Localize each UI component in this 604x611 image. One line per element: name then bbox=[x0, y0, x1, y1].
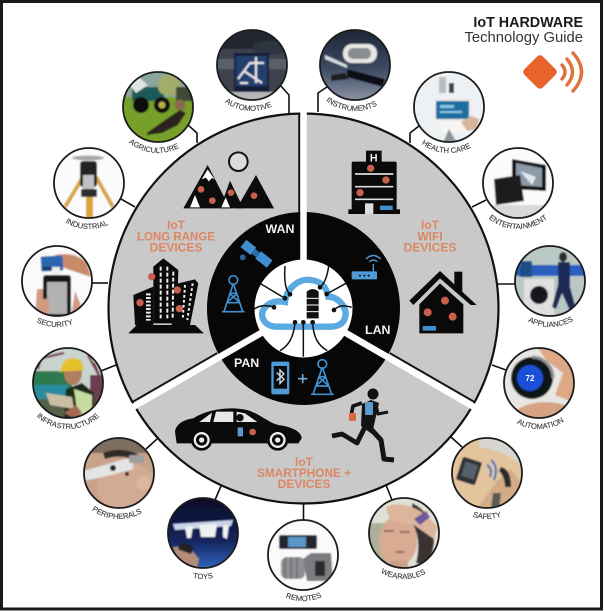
label: automotive: AUTOMOTIVE bbox=[224, 98, 272, 111]
heading: smartphone devices: DEVICES bbox=[278, 477, 330, 491]
station: automation bbox=[492, 347, 575, 429]
photo: agriculture bbox=[122, 71, 194, 143]
title: IoT HARDWARE bbox=[473, 15, 583, 31]
station: peripherals bbox=[83, 437, 158, 519]
icon: runner bbox=[332, 388, 394, 460]
icon: wifi router bbox=[352, 255, 381, 279]
photo: peripherals bbox=[83, 437, 157, 511]
label: WAN: WAN bbox=[266, 222, 294, 236]
heading: smartphone devices: SMARTPHONE + bbox=[257, 466, 351, 480]
station: toys bbox=[167, 486, 239, 580]
station: safety bbox=[450, 436, 523, 519]
label: wearables: WEARABLES bbox=[382, 568, 426, 579]
icon: plus bbox=[298, 374, 307, 383]
panel: outer grey disc bbox=[108, 114, 498, 504]
heading: wifi devices: WIFI bbox=[417, 230, 443, 244]
icon: car bbox=[175, 408, 302, 451]
label: peripherals: PERIPHERALS bbox=[92, 506, 142, 519]
heading: smartphone devices bbox=[257, 455, 351, 491]
label: agriculture: AGRICULTURE bbox=[128, 140, 180, 154]
divider strips between sectors bbox=[127, 105, 480, 410]
label: automation: AUTOMATION bbox=[516, 417, 564, 429]
icon: mountains bbox=[183, 152, 274, 208]
heading: wifi devices bbox=[404, 218, 456, 254]
heading: wifi devices: IoT bbox=[421, 218, 440, 232]
label: toys: TOYS bbox=[194, 572, 213, 580]
title: Technology Guide bbox=[465, 30, 583, 46]
label: PAN: PAN bbox=[234, 356, 259, 370]
icon: orange signal logo bbox=[522, 53, 582, 91]
photo: remotes bbox=[267, 519, 339, 591]
station: agriculture bbox=[122, 71, 198, 154]
heading: long range devices: LONG RANGE bbox=[137, 230, 215, 244]
title bbox=[465, 15, 583, 46]
label: entertainment: ENTERTAINMENT bbox=[489, 214, 546, 229]
label: safety: SAFETY bbox=[473, 512, 500, 519]
label: industrial: INDUSTRIAL bbox=[66, 218, 108, 229]
photo: automotive bbox=[216, 29, 288, 102]
icon: tower left bbox=[222, 276, 245, 312]
station: health care bbox=[409, 71, 485, 154]
station: remotes bbox=[267, 504, 339, 602]
heading: long range devices bbox=[137, 218, 215, 254]
station: wearables bbox=[368, 486, 440, 579]
icon: hospital bbox=[348, 151, 400, 214]
panel: white centre bbox=[254, 260, 352, 358]
photo: health care bbox=[413, 71, 485, 143]
photo: appliances bbox=[514, 245, 586, 317]
station: instruments bbox=[317, 29, 391, 112]
heading: long range devices: DEVICES bbox=[150, 240, 202, 254]
icon: city buildings bbox=[128, 258, 204, 333]
station: automotive bbox=[216, 29, 290, 113]
diagram: central wheel bbox=[108, 105, 498, 504]
station: infrastructure bbox=[32, 347, 116, 429]
icon: hospital: H bbox=[370, 153, 378, 165]
station: security bbox=[21, 245, 108, 328]
photo: instruments bbox=[319, 29, 391, 101]
photo: wearables bbox=[368, 497, 440, 571]
heading: long range devices: IoT bbox=[167, 218, 186, 232]
icon: cloud with server bbox=[254, 266, 352, 357]
icon: bluetooth phone bbox=[271, 362, 289, 394]
photo: entertainment bbox=[482, 147, 554, 219]
station: entertainment bbox=[472, 147, 554, 229]
label: health care: HEALTH CARE bbox=[422, 140, 471, 154]
icon: tower right bbox=[311, 360, 334, 394]
label: security: SECURITY bbox=[36, 318, 72, 328]
icon: house bbox=[409, 271, 477, 333]
label: infrastructure: INFRASTRUCTURE bbox=[36, 412, 100, 429]
label: remotes: REMOTES bbox=[286, 592, 322, 602]
photo: toys bbox=[167, 497, 239, 569]
icon: satellite bbox=[235, 240, 273, 275]
photo: security bbox=[21, 245, 93, 317]
station: appliances bbox=[498, 245, 586, 327]
photo: industrial bbox=[53, 147, 125, 219]
label: LAN: LAN bbox=[365, 323, 391, 337]
photo: infrastructure bbox=[32, 347, 104, 419]
panel: black network ring bbox=[207, 212, 400, 405]
heading: wifi devices: DEVICES bbox=[404, 240, 456, 254]
label: appliances: APPLIANCES bbox=[528, 316, 573, 327]
photo: automation: 72 bbox=[526, 374, 535, 383]
photo: safety bbox=[451, 437, 523, 509]
label: instruments: INSTRUMENTS bbox=[326, 96, 377, 112]
station: industrial bbox=[53, 147, 136, 229]
heading: smartphone devices: IoT bbox=[295, 455, 314, 469]
